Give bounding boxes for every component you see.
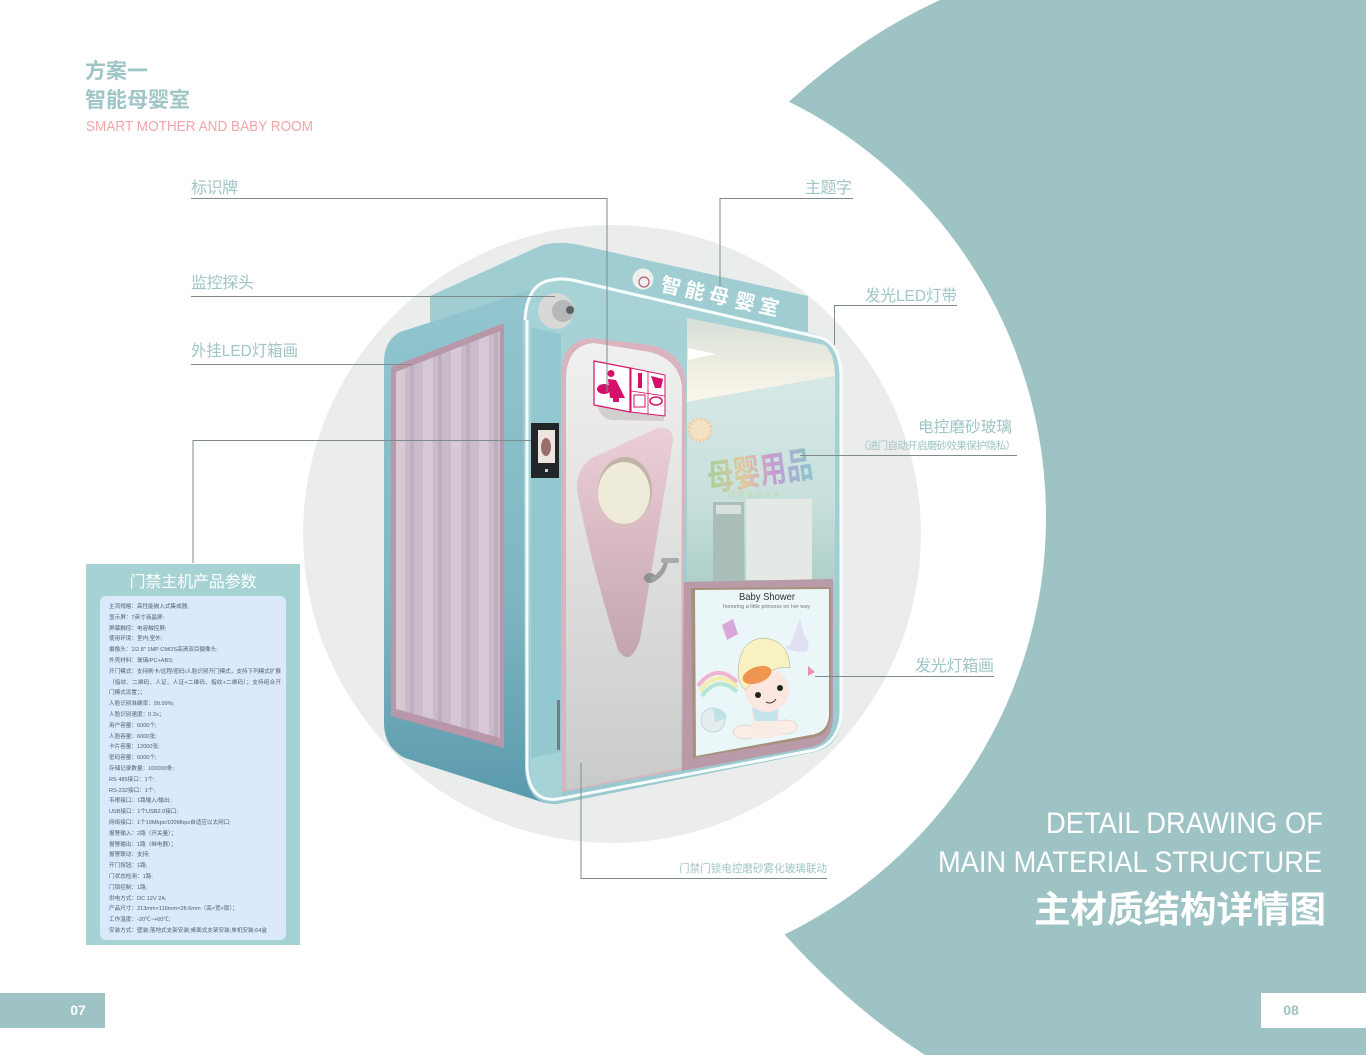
- side wall: [384, 290, 548, 804]
- parameter list: RS-232接口：1个;: [109, 786, 155, 794]
- parameter list: 用户容量：6000个;: [109, 721, 157, 729]
- parameter list: 使用环境：室内;室外;: [109, 634, 163, 642]
- panel heading: 门禁主机产品参数: [130, 573, 256, 591]
- roof: [430, 243, 808, 332]
- baby body: [750, 705, 783, 739]
- heading: detail drawing: [938, 807, 1326, 930]
- door round window: [598, 457, 652, 523]
- parameter list: 报警输出：1路（继电器）；: [109, 840, 176, 848]
- pram: [701, 708, 725, 732]
- parameter list: 外壳材料：玻璃/PC+ABS;: [109, 656, 174, 664]
- side strip: [529, 288, 562, 800]
- access control terminal: [531, 423, 559, 478]
- callout: 电控磨砂玻璃: [800, 418, 1017, 456]
- title block: [85, 59, 313, 135]
- callout: 标识牌: [191, 179, 607, 392]
- parameter list: 密码容量：6000个;: [109, 753, 157, 761]
- page number: 08: 08: [1283, 1002, 1299, 1018]
- callout: 门禁门锁电控磨砂雾化玻璃联动: [581, 763, 827, 878]
- callout: 主题字: [720, 179, 853, 286]
- parameter list: 门状态检测：1路;: [109, 872, 153, 880]
- parameter list: 开门按钮：1路;: [109, 861, 148, 869]
- door pink triangle: [577, 428, 673, 657]
- unicorn: [785, 618, 809, 652]
- parameter list: 人脸容量：6000张;: [109, 732, 157, 740]
- title block: SMART MOTHER AND BABY ROOM: [86, 118, 313, 135]
- door: [561, 338, 686, 792]
- parameter list: 网络接口：1个10Mbps/100Mbps自适应以太网口;: [109, 818, 231, 826]
- panel: access terminal product parameters: [86, 564, 300, 945]
- callout: 电控磨砂玻璃: （进门自动开启磨砂效果保护隐私）: [858, 439, 1016, 452]
- cabinet: [713, 502, 744, 581]
- pink toy: [722, 619, 738, 640]
- title block: 智能母婴室: [85, 88, 190, 112]
- callout: 监控探头: 监控探头: [191, 274, 254, 292]
- poster: [691, 587, 831, 758]
- callout: 发光LED灯带: 发光LED灯带: [865, 287, 957, 305]
- sign text: 室: [757, 293, 781, 321]
- parameter list: RS 485接口：1个;: [109, 775, 155, 783]
- sign text: 能: [683, 278, 707, 305]
- parameter list: USB接口：1个USB2.0接口;: [109, 807, 178, 815]
- parameter list: 摄像头：1/2.8" 1MP CMOS高清双目摄像头;: [109, 645, 218, 653]
- side LED light box: [391, 323, 504, 748]
- page number: 08: [1261, 993, 1366, 1028]
- page number: 07: [0, 993, 105, 1028]
- parameter list: 产品尺寸：213mm×116mm×28.6mm（高×宽×厚）；: [109, 904, 238, 912]
- sign band: [632, 268, 781, 321]
- surveillance camera: [538, 293, 574, 329]
- parameter list: 卡片容量：12000张;: [109, 742, 160, 750]
- background: white circle: [118, 53, 1046, 981]
- parameter list: 门锁控制：1路;: [109, 883, 148, 891]
- callout: 发光灯箱画: 发光灯箱画: [915, 657, 994, 675]
- parameter card: [100, 596, 286, 940]
- heading: detail drawing: 主材质结构详情图: [1034, 889, 1326, 930]
- parameter list: 人脸识别准确率：99.99%;: [109, 699, 175, 707]
- lower window frame: [682, 579, 833, 771]
- parameter list: 主流规格：高性能嵌入式集成器;: [109, 602, 189, 610]
- title block: 方案一: [85, 59, 148, 83]
- parameter list: 工作温度：-20℃~+60℃;: [109, 915, 171, 923]
- parameter list: 显示屏：7英寸液晶屏;: [109, 613, 164, 621]
- parameter list: 人脸识别速度：0.2s；: [109, 710, 164, 718]
- parameter list: （指纹、二维码、人证、人证+二维码、指纹+二维码）；支持组合开: [109, 678, 281, 686]
- heading: detail drawing: MAIN MATERIAL STRUCTURE: [938, 846, 1322, 879]
- parameter list: 屏幕触控：电容触控屏;: [109, 624, 167, 632]
- sign text: [659, 273, 781, 321]
- sun: [689, 419, 711, 441]
- parameter list: 报警输入：2路（开关量）；: [109, 829, 176, 837]
- LED strip: [525, 279, 841, 799]
- callout: 门禁门锁电控磨砂雾化玻璃联动: 门禁门锁电控磨砂雾化玻璃联动: [679, 862, 827, 875]
- sign text: 智: [659, 273, 683, 300]
- callout: 外挂LED灯箱画: 外挂LED灯箱画: [191, 342, 298, 360]
- frosted lettering: 母婴用品: [705, 444, 815, 499]
- front frame: [523, 277, 842, 804]
- rainbow: [698, 673, 737, 696]
- parameter list: 报警联动：支持;: [109, 850, 150, 858]
- window upper ceiling: [687, 318, 835, 402]
- parameter list: 安装方式：壁装;落地式支架安装;桌面式支架安装;单机安装;64盒: [109, 926, 267, 934]
- frosted glass: 母婴用品专卖: [728, 490, 780, 499]
- duck bill: [740, 662, 774, 688]
- signboard pink pictogram: [594, 361, 665, 421]
- background: grey circle behind booth: [303, 225, 921, 843]
- callout: 主题字: 主题字: [805, 179, 852, 197]
- baby legs: [733, 720, 797, 739]
- heading: detail drawing: DETAIL DRAWING OF: [1046, 807, 1323, 840]
- baby face: [745, 668, 789, 712]
- poster: honoring a little princess on her way: [723, 604, 811, 610]
- parameter list: 供电方式：DC 12V 2A;: [109, 894, 167, 902]
- poster: Baby Shower: [739, 591, 795, 603]
- duck hat: [738, 638, 790, 690]
- parameter list: 开门模式：支持刷卡/远程/密码/人脸识别开门模式，支持下列模式扩展: [109, 667, 281, 675]
- sign text: 婴: [733, 289, 757, 316]
- parameter list: 门模式设置；；: [109, 688, 145, 696]
- booth illustration: [384, 243, 842, 804]
- callout: access terminal leader line: [193, 440, 531, 563]
- parameter list: [109, 602, 281, 934]
- door handle: [644, 558, 679, 583]
- parameter list: 存储记录数量：100000条;: [109, 764, 174, 772]
- sign text: 母: [707, 284, 731, 310]
- logo: [632, 268, 654, 290]
- frosted glass: [687, 376, 835, 582]
- parameter list: 韦根接口：1路输入/输出;: [109, 796, 172, 804]
- background: teal shape: [700, 0, 1366, 1055]
- page number: 07: 07: [70, 1002, 86, 1018]
- callout: 电控磨砂玻璃: 电控磨砂玻璃: [918, 418, 1012, 436]
- callout: 标识牌: 标识牌: [191, 179, 238, 197]
- callout: 发光LED灯带: [834, 287, 957, 345]
